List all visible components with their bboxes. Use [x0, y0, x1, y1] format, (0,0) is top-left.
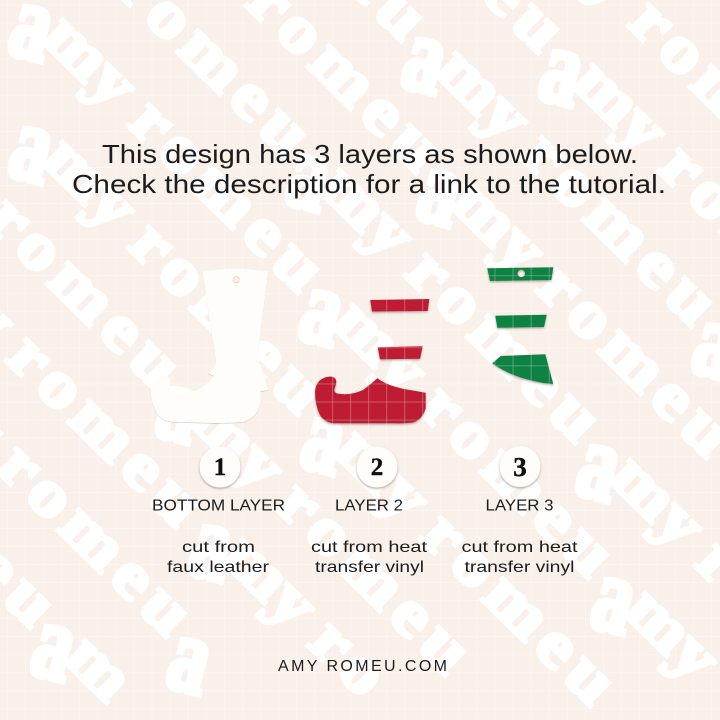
- watermark pattern: amy romeu: a: [157, 594, 225, 718]
- badge 3: 3: [513, 452, 527, 482]
- red shoe toe: [315, 376, 426, 423]
- step 3: layer 3: [462, 446, 578, 576]
- watermark pattern: amy romeu: a: [581, 534, 649, 658]
- watermark pattern: amy romeu: a: [179, 481, 247, 605]
- watermark pattern: amy romeu: m: [52, 618, 148, 715]
- watermark pattern: amy romeu: my romeu: [322, 411, 639, 720]
- watermark pattern: amy romeu: my ro: [210, 518, 409, 716]
- watermark pattern: amy romeu: my romeu: [177, 380, 494, 693]
- watermark pattern: amy romeu: a: [529, 6, 597, 130]
- green top band with hole: [487, 267, 553, 281]
- watermark pattern: amy romeu: a: [21, 581, 89, 705]
- watermark pattern: amy romeu: my romeu: [30, 0, 347, 311]
- badge 1: 1: [214, 454, 226, 481]
- heading: Check the description for a link to the tutorial.: [72, 169, 666, 199]
- bottom layer: white boot: [151, 269, 268, 423]
- layer 2: red boot pieces: [315, 299, 429, 423]
- step 2: layer 2: [311, 446, 428, 576]
- step 2: layer 2: cut from heat: [311, 539, 428, 556]
- step 3: layer 3: LAYER 3: [486, 498, 554, 514]
- watermark pattern: amy romeu: a: [146, 343, 214, 467]
- red middle band: [378, 346, 423, 359]
- watermark pattern: amy romeu: a: [566, 401, 634, 525]
- step 1: bottom layer: cut from: [182, 539, 255, 556]
- green middle band: [495, 315, 547, 328]
- step 1: bottom layer: [152, 446, 285, 576]
- watermark pattern: amy romeu: a: [276, 111, 344, 235]
- watermark pattern: amy romeu: a: [0, 83, 67, 207]
- watermark pattern: amy romeu: a: [289, 246, 357, 370]
- step 2: layer 2: transfer vinyl: [315, 559, 424, 576]
- red top band: [370, 299, 429, 312]
- step 3: layer 3: cut from heat: [462, 539, 578, 556]
- footer website: AMY ROMEU.COM: [278, 658, 447, 675]
- watermark pattern: amy romeu: a: [291, 374, 359, 498]
- green cuff wedge: [492, 354, 553, 384]
- watermark pattern: amy romeu: my romeu: [320, 283, 637, 596]
- watermark pattern: amy romeu: a: [407, 126, 475, 250]
- badge 2: 2: [371, 454, 383, 481]
- step 2: layer 2: LAYER 2: [335, 498, 403, 514]
- step 1: bottom layer: BOTTOM LAYER: [152, 498, 285, 514]
- watermark pattern: amy romeu: my romeu: [307, 148, 624, 461]
- layer 3: green boot pieces: [487, 267, 553, 384]
- step 3: layer 3: transfer vinyl: [464, 559, 574, 576]
- heading: This design has 3 layers as shown below.: [102, 139, 638, 169]
- watermark pattern: amy romeu: my romeu: [30, 120, 347, 433]
- step 1: bottom layer: faux leather: [167, 559, 270, 576]
- heading: [72, 139, 666, 199]
